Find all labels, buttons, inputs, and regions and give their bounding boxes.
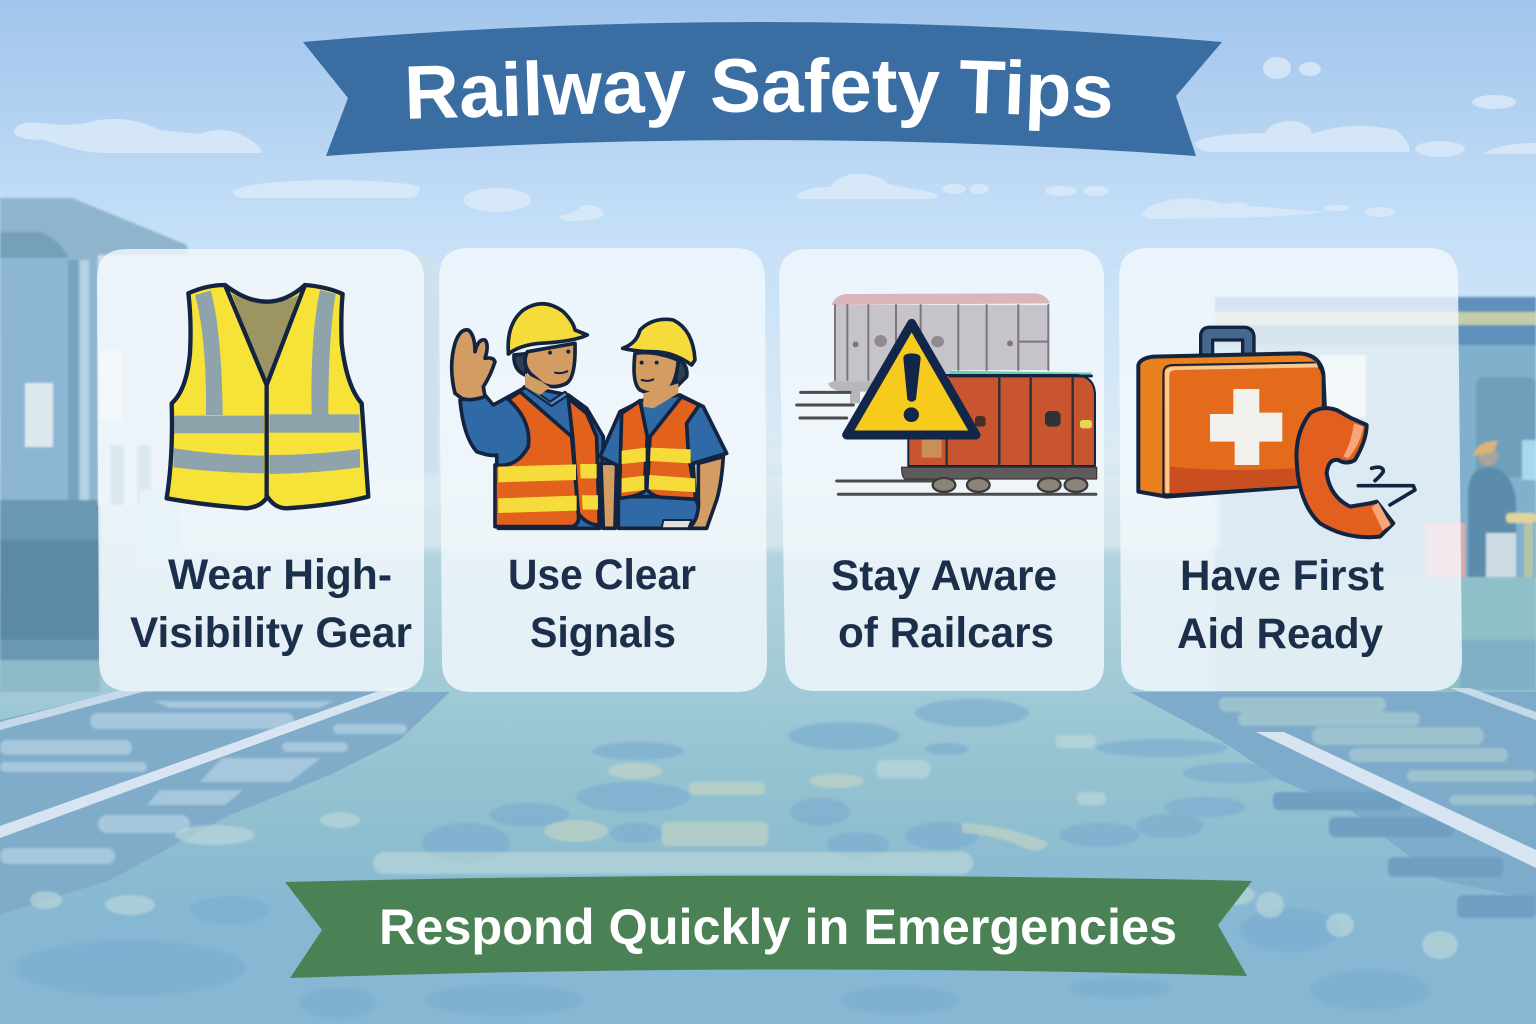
train left: [0, 198, 438, 692]
panel: first aid: [1119, 248, 1462, 691]
title text: Tips: [957, 44, 1115, 135]
icon: railcars and warning: [797, 293, 1097, 494]
title banner: [303, 22, 1222, 156]
station right: [1215, 297, 1536, 692]
icon: two workers: [452, 304, 727, 528]
red railcar: [902, 371, 1097, 492]
clouds: [14, 57, 1536, 221]
warning triangle: [847, 323, 976, 435]
left ties: [0, 701, 407, 864]
title text: [403, 43, 1115, 136]
ground blotches tan: [544, 763, 1047, 850]
ground blotches light: [30, 735, 1458, 959]
icon: safety vest: [167, 285, 368, 508]
panel: clear signals: [439, 248, 767, 692]
bottom banner: [285, 876, 1252, 978]
right ties and patches: [1219, 697, 1536, 918]
right worker: [600, 319, 727, 528]
horizon haze: [180, 475, 1220, 550]
panel: high-visibility gear: [97, 249, 424, 691]
label: Signals: [530, 609, 676, 657]
icon: first aid kit and phone: [1138, 327, 1415, 537]
label: of Railcars: [838, 609, 1054, 657]
label: Aid Ready: [1177, 610, 1383, 658]
title text: Safety: [710, 44, 940, 129]
label: Use Clear: [508, 551, 696, 599]
right ballast: [1130, 692, 1536, 900]
speed lines: [797, 392, 1096, 494]
left worker: [452, 304, 603, 528]
rails: [0, 688, 1536, 868]
ground blotches blue: [15, 699, 1430, 1019]
panel: railcars: [779, 249, 1104, 691]
left ballast: [0, 692, 450, 915]
banner text: Respond Quickly in Emergencies: [379, 899, 1177, 955]
label: Stay Aware: [831, 552, 1057, 600]
label: Visibility Gear: [130, 609, 412, 657]
label: Wear High-: [168, 551, 392, 599]
label: Have First: [1180, 552, 1384, 600]
phone: [1296, 408, 1415, 537]
grey railcar: [828, 293, 1050, 403]
title text: Railway: [403, 43, 687, 136]
